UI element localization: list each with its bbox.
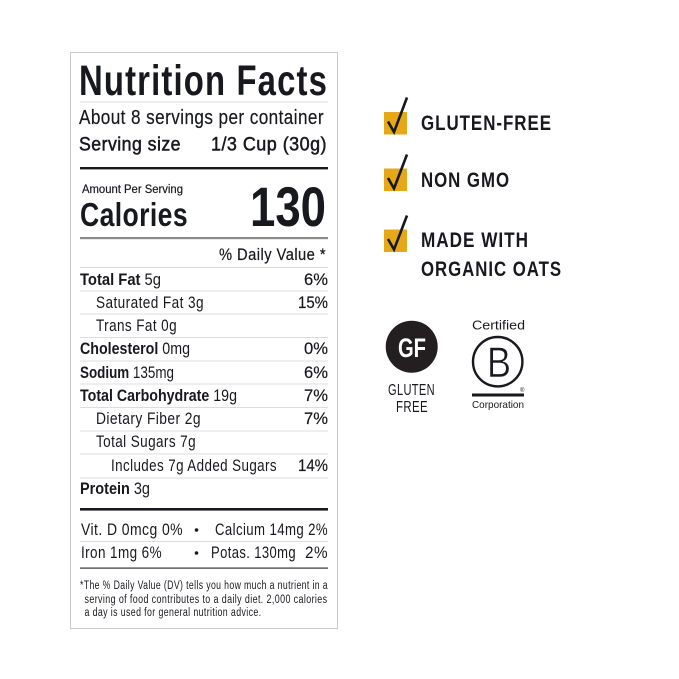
text: calories label: Calories	[80, 196, 188, 233]
heading: nutrition facts: Nutrition Facts	[79, 57, 328, 105]
nutrient rows: 14%	[298, 457, 328, 475]
icon: checkbox	[384, 216, 407, 252]
badge: certified b corporation: Certified	[472, 318, 525, 332]
claim: made with organic oats	[384, 216, 562, 281]
badge: certified b corporation: Corporation	[472, 399, 524, 411]
badge: gluten free: GLUTEN	[388, 382, 435, 399]
nutrient rows: Protein 3g	[80, 480, 150, 498]
claim: non gmo	[384, 154, 510, 192]
nutrient rows: 15%	[298, 294, 328, 312]
nutrient rows: Saturated Fat 3g	[96, 294, 204, 312]
nutrient rows: 6%	[304, 271, 328, 289]
footnote	[80, 580, 328, 619]
text: servings per container: About 8 servings per container	[79, 107, 324, 129]
badge: certified b corporation: ®	[520, 387, 525, 394]
text: daily value header: % Daily Value *	[219, 246, 326, 264]
badge: gluten free: FREE	[396, 399, 428, 416]
text: serving size: 1/3 Cup (30g)	[211, 134, 327, 156]
text: made with organic oats: MADE WITH	[421, 229, 529, 252]
nutrient rows: Includes 7g Added Sugars	[111, 457, 277, 475]
text: non gmo: NON GMO	[421, 169, 510, 192]
vitamins and minerals: Calcium 14mg 2%	[215, 521, 328, 539]
nutrient rows	[80, 271, 328, 498]
text: made with organic oats: ORGANIC OATS	[421, 258, 562, 281]
nutrient rows: Dietary Fiber 2g	[96, 410, 201, 428]
icon: checkbox	[384, 98, 407, 134]
nutrient rows: Total Fat 5g	[80, 271, 161, 289]
nutrient rows: 6%	[304, 364, 328, 382]
vitamins and minerals: Iron 1mg 6%	[81, 544, 162, 562]
vitamins and minerals: Vit. D 0mcg 0%	[81, 521, 183, 539]
nutrient rows: Total Carbohydrate 19g	[80, 387, 237, 405]
icon: checkbox	[384, 154, 407, 191]
nutrient rows: Total Sugars 7g	[96, 433, 196, 451]
text: serving size: Serving size	[79, 134, 181, 156]
vitamins and minerals	[81, 521, 328, 562]
nutrient rows: 7%	[304, 387, 328, 405]
nutrient rows: Cholesterol 0mg	[80, 340, 190, 358]
claim: gluten-free	[384, 98, 552, 135]
badge: gluten free	[386, 321, 438, 416]
badge: certified b corporation	[472, 318, 525, 411]
text: calories value: 130	[250, 175, 326, 238]
vitamins and minerals: Potas. 130mg	[211, 544, 296, 562]
footnote: serving of food contributes to a daily diet. 2,000 calories	[84, 594, 328, 606]
text: amount per serving: Amount Per Serving	[82, 184, 183, 196]
text: serving size	[79, 134, 327, 156]
nutrient rows: 7%	[304, 410, 328, 428]
footnote: *The % Daily Value (DV) tells you how much a nutrient in a	[80, 580, 328, 592]
text: gluten-free: GLUTEN-FREE	[421, 112, 552, 135]
nutrient rows: Trans Fat 0g	[96, 317, 177, 335]
nutrient rows: Sodium 135mg	[80, 364, 174, 382]
panel: nutrition facts	[70, 52, 338, 628]
text: made with organic oats	[421, 229, 562, 281]
badge: certified b corporation: B	[487, 339, 511, 387]
nutrient rows: 0%	[304, 340, 328, 358]
footnote: a day is used for general nutrition advice.	[84, 607, 262, 619]
badge: gluten free: GF	[398, 333, 426, 363]
vitamins and minerals: 2%	[305, 544, 328, 562]
